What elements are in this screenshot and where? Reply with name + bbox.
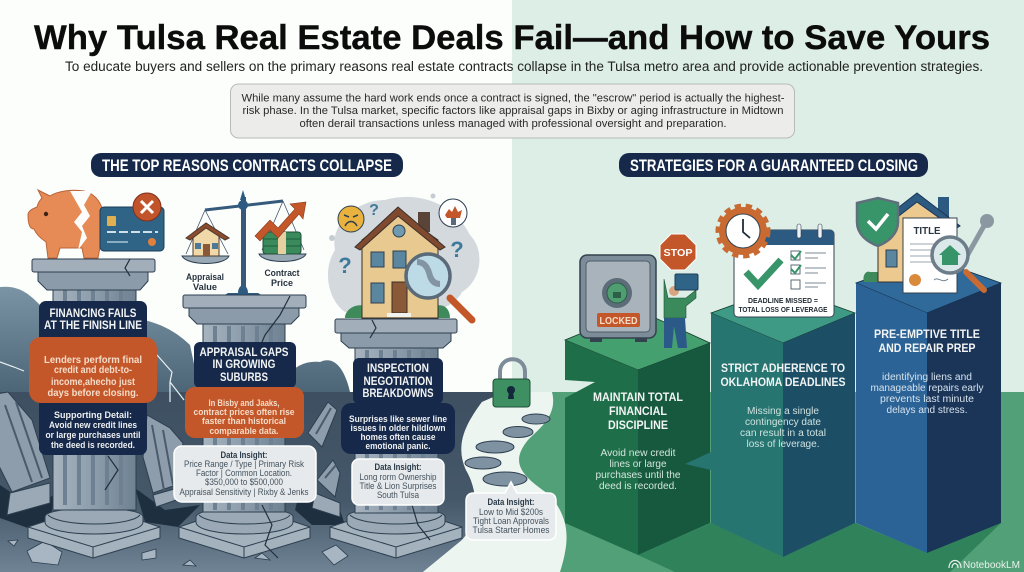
heading: DISCIPLINE: [608, 420, 668, 432]
text panel: financing orange: income,ahecho just: [51, 377, 136, 388]
body: [740, 406, 826, 450]
heading: left section: [91, 153, 403, 177]
data insight: price range: Factor | Common Location.: [196, 468, 292, 478]
plinth: [28, 505, 160, 558]
data insight: long term ownership: Data Insight:: [374, 462, 422, 472]
data insight: starter homes: Data Insight:: [488, 497, 535, 507]
data insight: long term ownership: South Tulsa: [377, 490, 419, 500]
text panel: appraisal orange: [185, 387, 304, 438]
icon: appraisal scale: Price: [271, 278, 293, 289]
intro callout: risk phase. In the Tulsa market, specific factors like appraisal gaps in Bixby or aging infrastructure in Midtown: [242, 105, 784, 117]
body: loss of leverage.: [746, 439, 820, 450]
supporting detail: [46, 410, 140, 450]
ground fissure shadows: [0, 485, 345, 528]
text panel: inspection title: NEGOTIATION: [364, 376, 432, 388]
green ground: [519, 392, 1024, 572]
block 3: title and repair: [856, 257, 1001, 553]
body: delays and stress.: [886, 405, 968, 416]
data insight: long term ownership: Title & Lion Surprises: [360, 481, 437, 491]
data insight: price range: Price Range / Type | Primary Risk: [184, 459, 304, 469]
text panel: appraisal title: [194, 342, 296, 388]
data insight: price range: Data Insight:: [220, 450, 268, 460]
body: Avoid new credit: [600, 448, 676, 459]
title: Why Tulsa Real Estate Deals Fail—and How to Save Yours: [34, 19, 990, 57]
icon: distressed house and magnifier: ?: [369, 202, 379, 219]
text panel: financing orange: days before closing.: [48, 388, 139, 399]
heading: [720, 363, 846, 389]
text panel: appraisal orange: faster than historical: [202, 416, 286, 426]
fallen column right: [308, 402, 340, 517]
lightning bolts: [0, 355, 184, 402]
icon: broken piggy bank and card: [28, 190, 164, 258]
icon: green padlock: [493, 359, 530, 407]
body: can result in a total: [740, 428, 826, 439]
stepping stones: [465, 414, 550, 486]
text panel: financing orange: Lenders perform final: [44, 355, 142, 366]
supporting detail: or large purchases until: [46, 430, 140, 440]
text panel: inspection body: homes often cause: [360, 432, 436, 442]
heading: PRE-EMPTIVE TITLE: [874, 329, 980, 341]
body: purchases until the: [596, 470, 681, 481]
icon: appraisal scale: Value: [193, 282, 217, 293]
data insight: long term ownership: Long rorm Ownership: [360, 472, 436, 482]
supporting detail: Avoid new credit lines: [49, 420, 137, 430]
text panel: inspection body: emotional panic.: [366, 441, 430, 451]
ground: cracked slate: [0, 392, 505, 572]
text panel: inspection title: BREAKDOWNS: [362, 388, 434, 400]
heading: right section: STRATEGIES FOR A GUARANTEED CLOSING: [630, 156, 918, 175]
body: manageable repairs early: [870, 383, 984, 394]
heading: FINANCIAL: [609, 406, 667, 418]
heading: OKLAHOMA DEADLINES: [720, 377, 846, 389]
column 3: [330, 319, 462, 558]
icon: appraisal scale: Appraisal: [186, 272, 224, 283]
icon: clock gear and calendar: [719, 207, 834, 317]
icon: locked safe: [580, 255, 656, 342]
data insight: starter homes: [466, 482, 556, 540]
icon: stop sign and person: [660, 234, 698, 348]
body: Missing a single: [747, 406, 819, 417]
text panel: financing title and detail: [39, 301, 147, 455]
intro callout: often derail transactions unless managed with professional oversight and preparation.: [300, 118, 726, 130]
fallen column left: [0, 392, 50, 515]
icon: distressed house and magnifier: ?: [338, 253, 352, 278]
heading: right section: [619, 153, 928, 177]
icon: clock gear and calendar: TOTAL LOSS OF LEVERAGE: [738, 305, 828, 314]
text panel: appraisal orange: contract prices often rise: [194, 407, 294, 417]
subtitle: To educate buyers and sellers on the primary reasons real estate contracts collapse in the Tulsa metro area and provide actionable prevention strategies.: [65, 59, 983, 74]
text panel: inspection body: Surprises like sewer line: [349, 414, 447, 424]
text panel: financing orange: credit and debt-to-: [54, 365, 132, 376]
column 1: [28, 259, 160, 558]
intro callout: While many assume the hard work ends once a contract is signed, the "escrow" period is actually the highest-: [242, 92, 785, 104]
text panel: inspection body: [341, 403, 455, 454]
data insight: price range: $350,000 to $500,000: [205, 477, 283, 487]
text panel: financing title and detail: AT THE FINISH LINE: [44, 320, 142, 332]
icon: stop sign and person: STOP: [664, 247, 692, 259]
intro callout: [230, 84, 794, 138]
body: deed is recorded.: [599, 481, 677, 492]
text panel: appraisal orange: In Bisby and Jaaks,: [208, 398, 280, 408]
text panel: appraisal title: IN GROWING: [212, 359, 276, 371]
supporting detail: Supporting Detail:: [54, 410, 132, 420]
logo: NotebookLM: NotebookLM: [963, 559, 1020, 571]
body: lines or large: [610, 459, 667, 470]
data insight: starter homes: Tulsa Starter Homes: [472, 525, 550, 535]
data insight: price range: [174, 446, 316, 502]
heading: AND REPAIR PREP: [878, 343, 976, 355]
body: prevents last minute: [880, 394, 974, 405]
icon: appraisal scale: [182, 190, 306, 296]
icon: distressed house and magnifier: ?: [450, 237, 464, 262]
body: contingency date: [745, 417, 821, 428]
block 2: oklahoma deadlines: [685, 287, 855, 557]
block 1: financial discipline: [565, 310, 710, 555]
icon: clock gear and calendar: DEADLINE MISSED =: [748, 296, 819, 305]
icon: locked safe: LOCKED: [600, 315, 638, 327]
data insight: starter homes: Tight Loan Approvals: [473, 516, 549, 526]
text panel: financing orange: [29, 337, 157, 403]
text panel: appraisal title: APPRAISAL GAPS: [200, 347, 289, 359]
text panel: inspection title: INSPECTION: [367, 363, 429, 375]
icon: appraisal scale: Contract: [264, 268, 300, 279]
heading: left section: THE TOP REASONS CONTRACTS COLLAPSE: [102, 156, 392, 175]
text panel: financing title and detail: FINANCING FAILS: [50, 308, 137, 320]
body: [596, 448, 681, 492]
heading: [593, 392, 683, 432]
icon: shield, house, title document, magnifier, wrench: TITLE: [914, 225, 940, 237]
plinth: [179, 505, 310, 558]
text panel: inspection body: issues in older hildlown: [350, 423, 446, 433]
rubble stones: [8, 540, 348, 566]
heading: STRICT ADHERENCE TO: [721, 363, 845, 375]
text panel: appraisal title: SUBURBS: [220, 372, 268, 384]
text panel: inspection title: [353, 358, 443, 404]
supporting detail: the deed is recorded.: [51, 440, 135, 450]
text panel: appraisal orange: comparable data.: [210, 426, 278, 436]
green shadow band: [638, 523, 1001, 572]
column 2: [174, 295, 316, 558]
winding path: [423, 392, 567, 572]
icon: shield, house, title document, magnifier, wrench: [857, 193, 994, 293]
data insight: price range: Appraisal Sensitivity | Rixby & Jenks: [180, 487, 309, 497]
body: [870, 372, 984, 416]
heading: [874, 329, 980, 355]
body: identifying liens and: [882, 372, 972, 383]
data insight: long term ownership: [352, 459, 444, 505]
plinth: [330, 505, 462, 558]
data insight: starter homes: Low to Mid $200s: [479, 507, 543, 517]
fallen column middle: [143, 415, 185, 507]
icon: distressed house and magnifier: [328, 194, 479, 320]
heading: MAINTAIN TOTAL: [593, 392, 683, 404]
storm clouds: [0, 287, 350, 392]
